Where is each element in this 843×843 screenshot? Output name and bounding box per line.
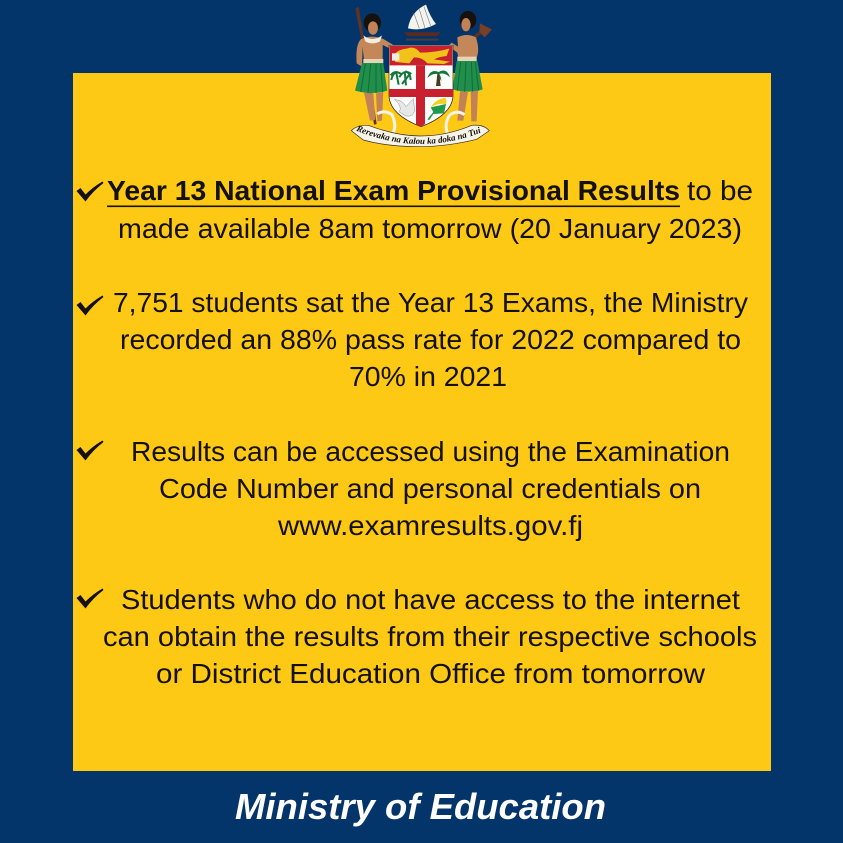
text block: how to access results: Code Number and personal credentials on [159, 473, 701, 504]
text block: pass rate: 70% in 2021 [349, 361, 507, 392]
icon: Fiji coat of arms [350, 4, 492, 147]
sugar cane [391, 71, 411, 85]
check icon 3 [76, 440, 104, 460]
text block: how to access results: Results can be accessed using the Examination [131, 436, 730, 467]
text block: exam results date [107, 175, 753, 244]
left supporter with spear [355, 7, 395, 125]
chief band with lion [390, 46, 452, 65]
shield [389, 45, 453, 127]
text block: pass rate: 7,751 students sat the Year 13 Exams, the Ministry [113, 287, 748, 318]
check icon 1 [76, 182, 104, 202]
red cross [389, 65, 453, 127]
text block: how to access results [131, 436, 730, 541]
text block: how to access results: www.examresults.gov.fj [277, 510, 583, 541]
motto scroll [350, 124, 490, 147]
text block: exam results date: made available 8am tomorrow (20 January 2023) [118, 213, 742, 244]
motto text: Rerevaka na Kalou ka doka na Tui [356, 126, 481, 144]
text block: students without internet: or District Education Office from tomorrow [156, 658, 706, 689]
footer: ministry name: Ministry of Education [235, 786, 606, 827]
panel: yellow notice [73, 73, 771, 771]
text block: pass rate: recorded an 88% pass rate for 2022 compared to [120, 324, 741, 355]
text block: pass rate [113, 287, 748, 392]
text block: students without internet: can obtain the results from their respective schools [103, 621, 757, 652]
text block: exam results date: to be [687, 175, 753, 206]
check icon 4 [76, 588, 104, 608]
canoe crest [403, 5, 441, 41]
check icon 2 [76, 296, 104, 316]
bananas [427, 104, 446, 120]
text block: students without internet: Students who do not have access to the internet [121, 584, 740, 615]
coconut palm [427, 71, 450, 86]
right supporter with axe [448, 11, 492, 121]
text block: students without internet [103, 584, 757, 689]
scroll ends [377, 112, 465, 133]
dove [395, 99, 415, 116]
text block: exam results date: Year 13 National Exam Provisional Results [107, 175, 680, 206]
